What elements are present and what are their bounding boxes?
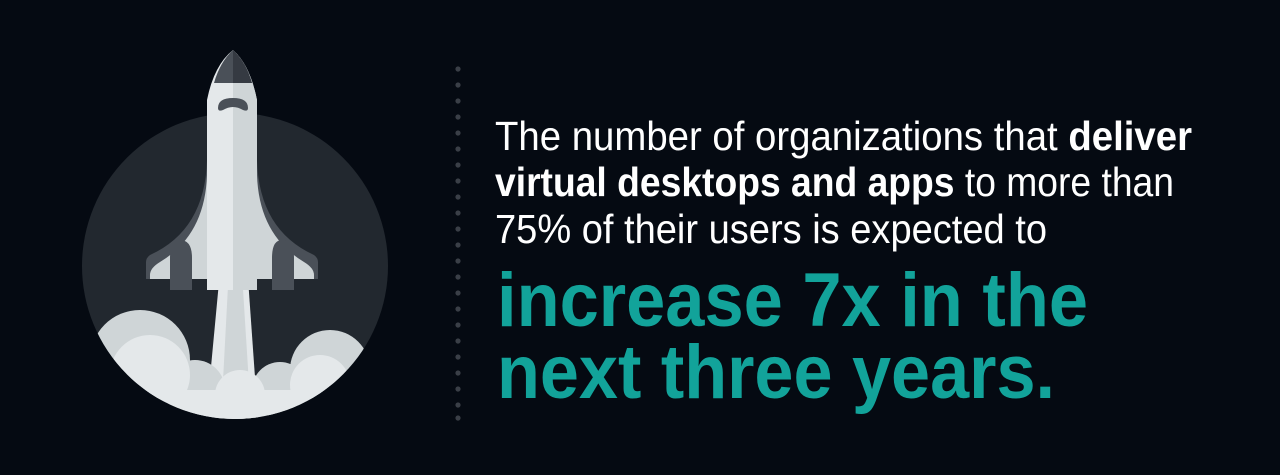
icon: rocket launch in circle — [82, 50, 388, 430]
text block: statement: 75% of their users is expected to — [495, 206, 1047, 252]
nose cone — [214, 50, 252, 83]
window — [218, 98, 248, 111]
exhaust plume — [206, 290, 258, 419]
headline: increase 7x — [497, 258, 1088, 415]
text block: statement: The number of organizations that deliver — [495, 113, 1192, 159]
engines — [170, 240, 192, 290]
headline: increase 7x: increase 7x in the — [497, 258, 1088, 343]
text block: statement — [495, 113, 1192, 252]
clouds — [90, 310, 370, 420]
wings — [146, 160, 318, 279]
text block: statement: virtual desktops and apps to more than — [495, 159, 1174, 205]
body — [207, 50, 257, 290]
dotted divider — [455, 66, 461, 421]
headline: increase 7x: next three years. — [497, 330, 1055, 415]
